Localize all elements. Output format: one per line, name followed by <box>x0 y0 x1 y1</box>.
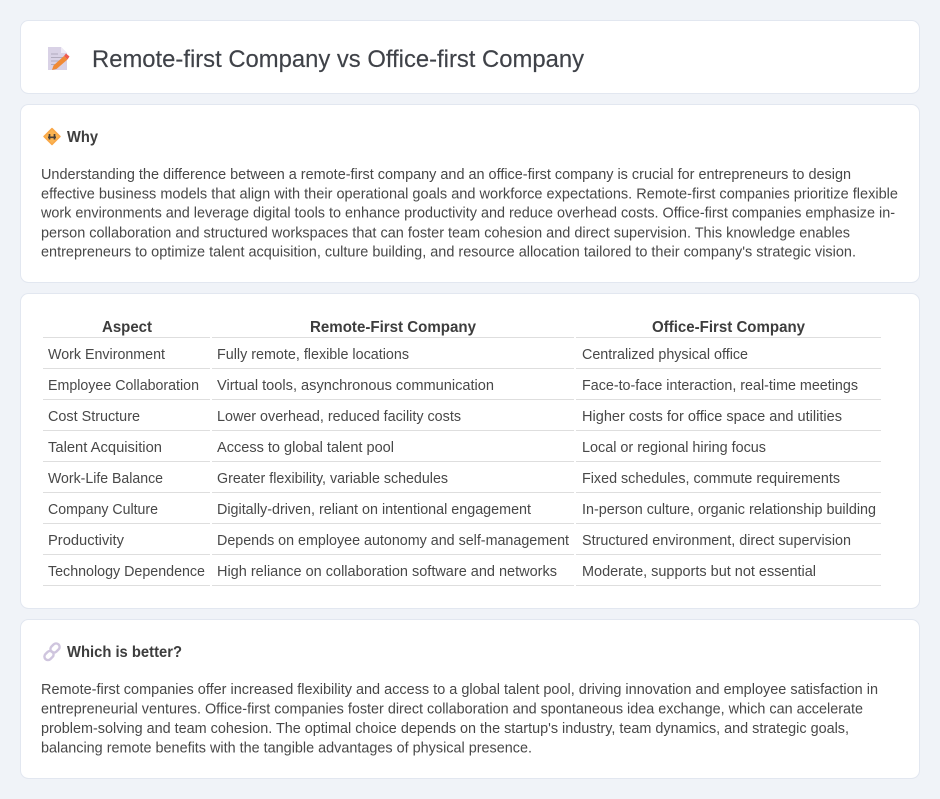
panel: which is better <box>20 620 920 778</box>
why paragraph: Understanding the difference between a remote-first company and an office-first company is crucial for entrepreneurs to design <box>41 167 851 183</box>
row: work-life balance: Greater flexibility, variable schedules <box>217 471 448 487</box>
row: productivity: Productivity <box>48 533 125 549</box>
why paragraph: work environments and leverage digital tools to enhance productivity and reduce overhead costs. Office-first companies emphasize in- <box>40 206 895 222</box>
why paragraph: effective business models that align with their operational goals and workforce expectations. Remote-first companies prioritize flexible <box>41 186 898 202</box>
row: work-life balance: Work-Life Balance <box>48 471 163 487</box>
row: productivity: Structured environment, direct supervision <box>582 533 851 549</box>
row: company culture: In-person culture, organic relationship building <box>582 502 876 518</box>
row: work environment <box>48 347 748 363</box>
heading: why: Why <box>67 129 98 146</box>
row: technology dependence <box>48 564 816 580</box>
why paragraph <box>40 167 898 260</box>
row: company culture <box>48 502 876 518</box>
row: cost structure: Higher costs for office space and utilities <box>582 409 842 425</box>
row: employee collaboration <box>48 378 858 394</box>
row: cost structure: Cost Structure <box>48 409 140 425</box>
row: talent acquisition: Access to global talent pool <box>217 440 394 456</box>
row: work environment: Centralized physical office <box>582 347 748 363</box>
table header row: Office-First Company <box>652 319 805 336</box>
row: technology dependence: Technology Dependence <box>48 564 205 580</box>
row: cost structure <box>48 409 842 425</box>
panel: comparison table <box>20 294 920 608</box>
row: employee collaboration: Face-to-face interaction, real-time meetings <box>582 378 858 394</box>
row: employee collaboration: Virtual tools, asynchronous communication <box>217 378 494 394</box>
row: work-life balance <box>48 471 840 487</box>
row: employee collaboration: Employee Collaboration <box>48 378 199 394</box>
row: productivity: Depends on employee autonomy and self-management <box>217 533 569 549</box>
row: work-life balance: Fixed schedules, commute requirements <box>582 471 840 487</box>
which is better paragraph <box>41 682 878 756</box>
title heading: Remote-first Company vs Office-first Company <box>92 46 584 73</box>
why paragraph: entrepreneurs to optimize talent acquisition, culture building, and resource allocation tailored to their company's strategic vision. <box>41 244 856 260</box>
icon: document with pencil <box>48 47 70 70</box>
table header row: Remote-First Company <box>310 319 476 336</box>
which is better paragraph: balancing remote benefits with the tangible advantages of physical presence. <box>41 740 532 756</box>
row: talent acquisition: Local or regional hiring focus <box>582 440 766 456</box>
which is better paragraph: entrepreneurial ventures. Office-first companies foster direct collaboration and spontaneous idea exchange, which can accelerate <box>41 702 863 718</box>
row: talent acquisition: Talent Acquisition <box>48 440 162 456</box>
row: productivity <box>48 533 851 549</box>
table header row <box>102 319 805 336</box>
row: talent acquisition <box>48 440 766 456</box>
why paragraph: person collaboration and structured workspaces that can foster team cohesion and direct supervision. This knowledge enables <box>41 225 850 241</box>
icon: orange diamond sign <box>44 128 60 144</box>
row: work environment: Work Environment <box>48 347 165 363</box>
row: company culture: Company Culture <box>48 502 158 518</box>
table header row: Aspect <box>102 319 153 336</box>
row: technology dependence: High reliance on collaboration software and networks <box>217 564 557 580</box>
row: cost structure: Lower overhead, reduced facility costs <box>217 409 461 425</box>
which is better paragraph: Remote-first companies offer increased flexibility and access to a global talent pool, driving innovation and employee satisfaction in <box>41 682 878 698</box>
row: work environment: Fully remote, flexible locations <box>217 347 409 363</box>
panel: why <box>20 104 920 282</box>
icon: chain link <box>43 642 61 662</box>
heading: which is better: Which is better? <box>67 644 182 661</box>
row: company culture: Digitally-driven, reliant on intentional engagement <box>217 502 531 518</box>
row: technology dependence: Moderate, supports but not essential <box>582 564 816 580</box>
which is better paragraph: problem-solving and team cohesion. The optimal choice depends on the startup's industry, team dynamics, and strategic goals, <box>41 721 849 737</box>
panel: title <box>20 20 920 94</box>
